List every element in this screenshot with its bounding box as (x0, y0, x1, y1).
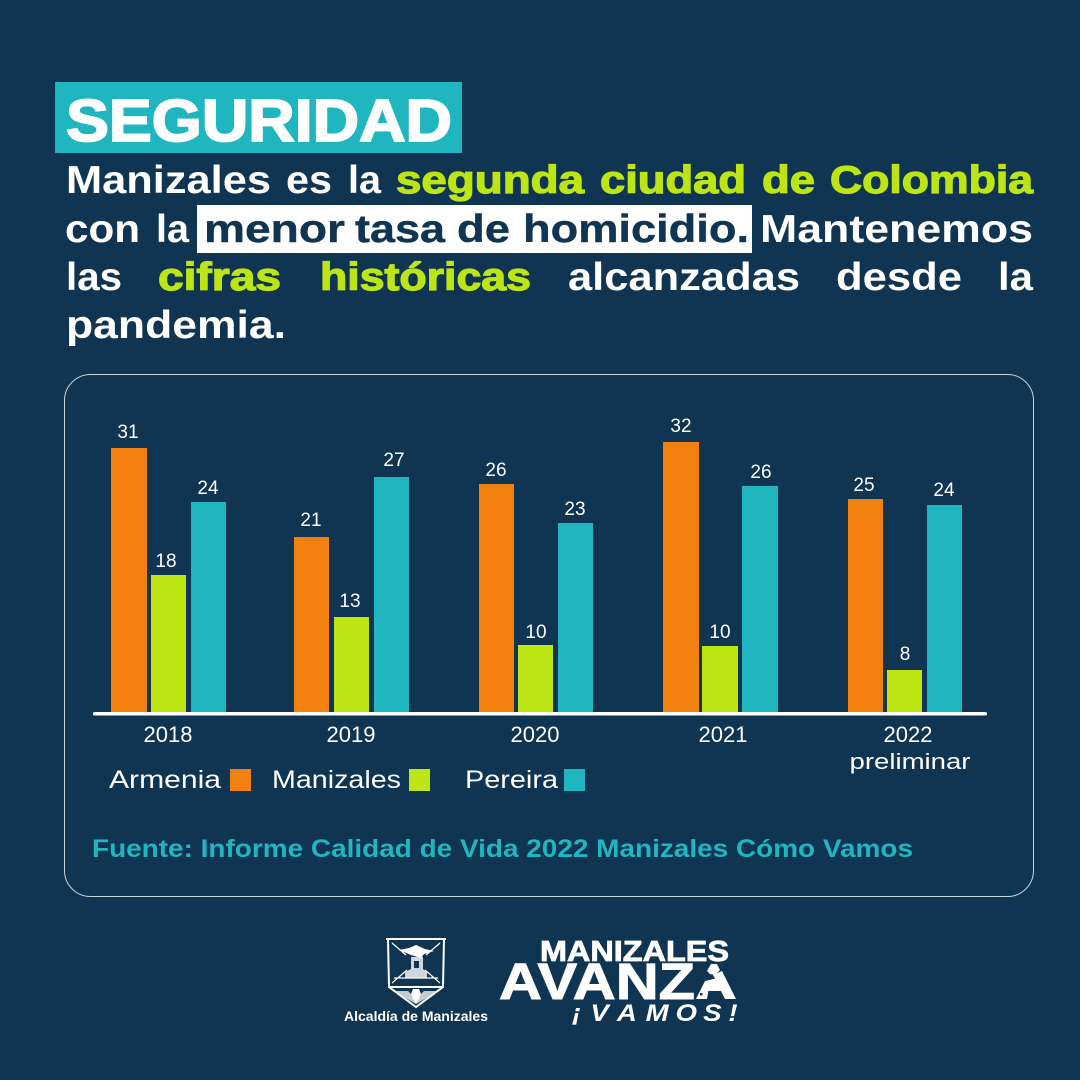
bars 2022: 24 (933, 480, 955, 501)
intro text block: tasa (355, 208, 446, 251)
legend: Manizales (272, 766, 401, 794)
legend: Pereira (465, 766, 558, 794)
logo: Manizales Avanza Vamos: AVANZ (499, 953, 695, 1010)
bars 2022 (848, 475, 970, 774)
intro text block: es (286, 159, 332, 202)
intro text block: cifras (158, 256, 281, 299)
logo: Manizales Avanza Vamos: MANIZALES (540, 936, 729, 968)
intro text block: desde (836, 256, 962, 299)
intro text block: Colombia (830, 159, 1034, 202)
bars 2018: 18 (155, 551, 177, 572)
logo: Manizales Avanza Vamos (499, 936, 738, 1027)
legend: Armenia (109, 766, 221, 794)
intro text block: menor (204, 208, 345, 251)
bars 2022: preliminar (850, 749, 970, 774)
bars 2021: 26 (750, 462, 772, 483)
bars 2020: 26 (485, 460, 507, 481)
intro text block: la (156, 208, 190, 251)
bars 2020 (479, 460, 593, 747)
logo: Alcaldía de Manizales: Alcaldía de Manizales (344, 1008, 488, 1024)
icon: stylised letter A with figure (696, 964, 736, 999)
bars 2019: 13 (339, 591, 361, 612)
title: SEGURIDAD: SEGURIDAD (66, 88, 452, 154)
intro text block: la (998, 256, 1034, 299)
bars 2018 (111, 422, 226, 747)
axis baseline (93, 712, 987, 716)
bars 2020: 2020 (511, 722, 559, 747)
bar chart (93, 416, 987, 774)
bars 2019: 21 (300, 510, 322, 531)
bars 2020: 10 (525, 622, 547, 643)
bars 2019: 2019 (327, 722, 375, 747)
bars 2021: 2021 (699, 722, 747, 747)
intro text block: Manizales (66, 159, 271, 202)
intro text block: alcanzadas (568, 256, 800, 299)
bars 2019: 27 (383, 450, 405, 471)
bars 2018: 2018 (144, 722, 192, 747)
bars 2019 (294, 450, 409, 747)
intro text block: con (65, 208, 140, 251)
logo: Alcaldía de Manizales (344, 938, 488, 1024)
intro text block: Mantenemos (760, 208, 1033, 251)
legend (109, 766, 585, 794)
bars 2022: 8 (900, 644, 910, 665)
intro text block: de (457, 208, 510, 251)
bars 2021: 10 (709, 622, 731, 643)
intro text block: históricas (320, 256, 531, 299)
source note: Fuente: Informe Calidad de Vida 2022 Manizales Cómo Vamos (92, 835, 913, 863)
intro text block: las (66, 256, 122, 299)
bars 2021: 32 (670, 416, 692, 437)
bars 2018: 31 (117, 422, 139, 443)
icon: shield (386, 938, 446, 1007)
intro text block: segunda (396, 159, 585, 202)
intro text block: de (762, 159, 815, 202)
panel: chart container (64, 374, 1034, 896)
logo: Manizales Avanza Vamos: ¡VAMOS! (572, 1001, 738, 1027)
bars 2018: 24 (197, 478, 219, 499)
intro text block: pandemia. (66, 304, 286, 347)
bars 2021 (663, 416, 778, 747)
intro text block: ciudad (600, 159, 746, 202)
intro text block: la (348, 159, 382, 202)
bars 2020: 23 (564, 499, 586, 520)
bars 2022: 25 (853, 475, 875, 496)
intro text block (65, 159, 1034, 347)
intro text block: homicidio. (523, 208, 749, 251)
bars 2022: 2022 (884, 722, 932, 747)
